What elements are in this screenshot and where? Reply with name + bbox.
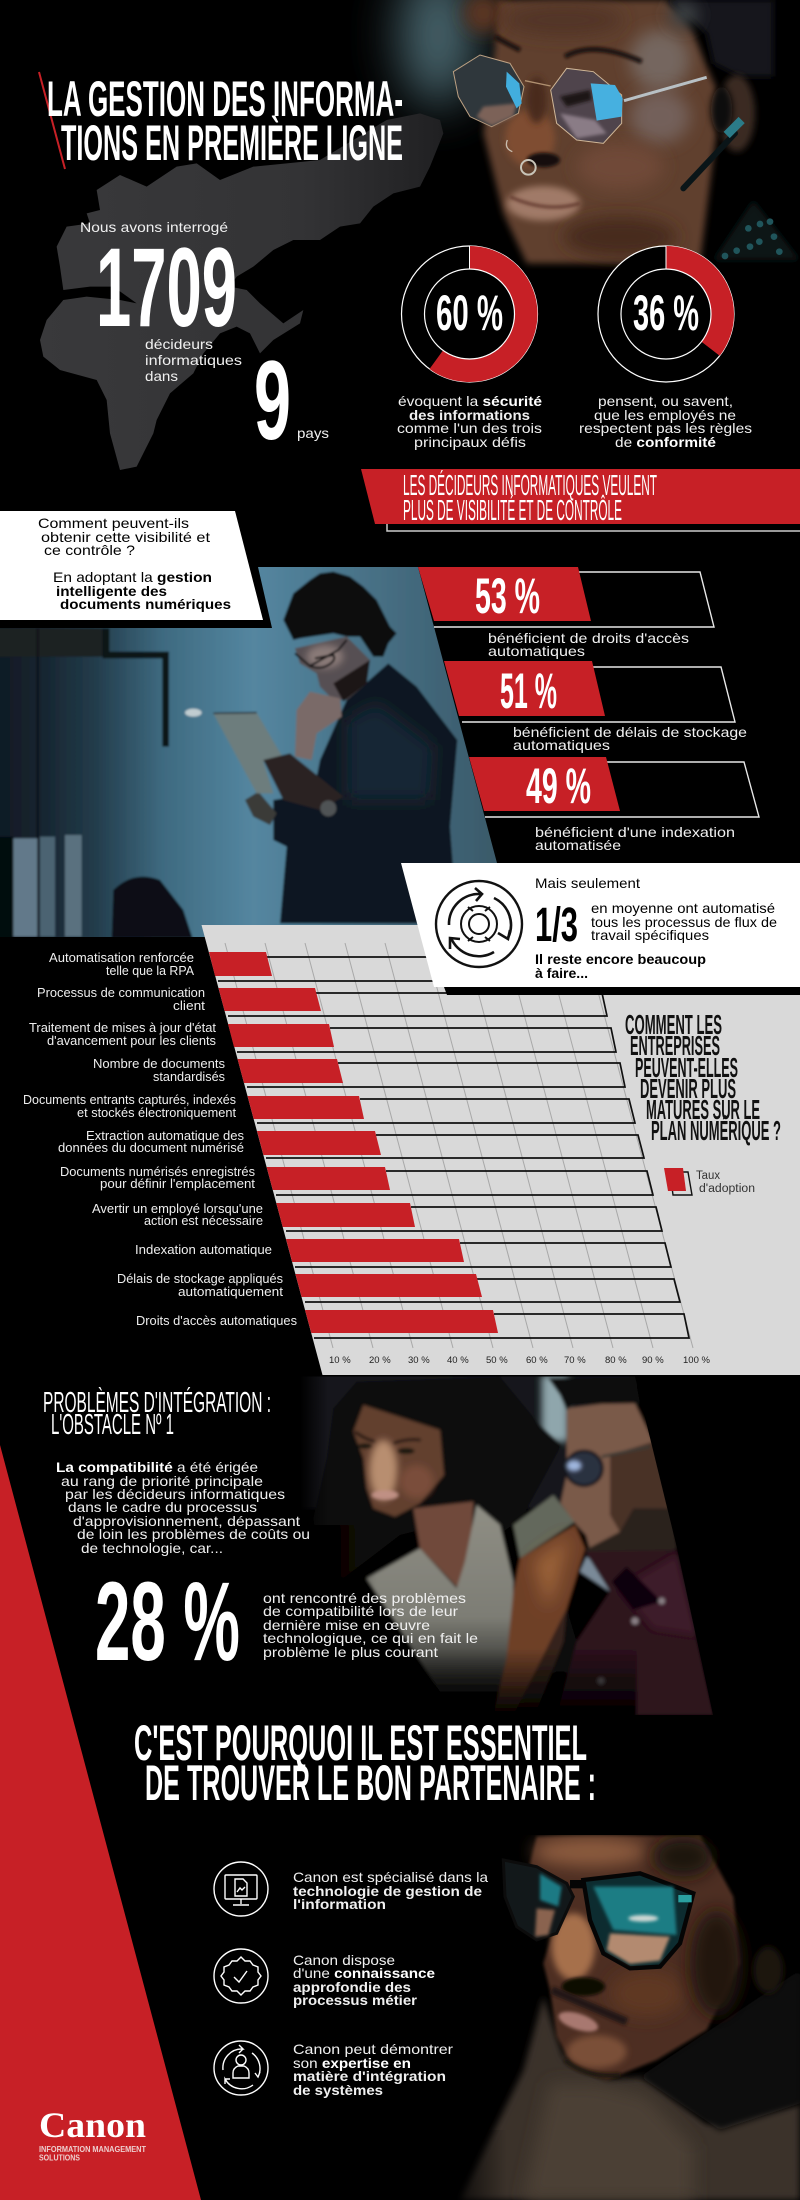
category labels: pour définir l'emplacement — [100, 1177, 256, 1191]
text: compliance caption — [579, 393, 752, 450]
category labels: Délais de stockage appliqués — [117, 1272, 283, 1286]
category labels: Indexation automatique — [135, 1243, 272, 1257]
axis labels: 100 % — [683, 1355, 710, 1366]
panel: how to get visibility: documents numériques — [60, 596, 231, 612]
text: compatibility: dans le cadre du processus — [68, 1499, 257, 1515]
text: compatibility: par les décideurs informatiques — [65, 1486, 285, 1502]
category labels: standardisés — [153, 1070, 225, 1084]
category labels: telle que la RPA — [106, 964, 195, 978]
text: compatibility: La compatibilité a été érigée — [56, 1459, 258, 1475]
panel: only one third — [401, 863, 800, 995]
stat: 53 % — [418, 567, 714, 659]
panel: only one third: à faire... — [535, 965, 588, 981]
stat: 51 % — [444, 661, 747, 753]
icon: person with cycle — [214, 2041, 268, 2095]
stat: 28 %: 28 % — [95, 1559, 240, 1684]
title: LA GESTION DES INFORMA- — [47, 71, 403, 127]
text: compliance caption: pensent, ou savent, — [598, 393, 733, 409]
text: compatibility: au rang de priorité principale — [61, 1473, 263, 1489]
list: Canon strengths: d'une connaissance — [293, 1965, 435, 1981]
list: Canon strengths: Canon est spécialisé dans la — [293, 1869, 488, 1885]
category labels: Droits d'accès automatiques — [136, 1314, 297, 1328]
panel: how to get visibility: Comment peuvent-ils — [38, 515, 189, 531]
category labels: données du document numérisé — [58, 1141, 244, 1155]
title — [39, 71, 403, 171]
stat: 1709 respondents: 1709 — [96, 225, 237, 350]
donut chart: 36 %: 36 % — [633, 285, 699, 341]
category labels — [23, 951, 297, 1328]
photo: man with glasses — [440, 1835, 800, 2200]
stat: 51 %: 51 % — [500, 663, 557, 719]
title: TIONS EN PREMIÈRE LIGNE — [61, 115, 403, 171]
axis labels: 50 % — [486, 1355, 508, 1366]
stat: 28 % — [95, 1559, 478, 1684]
logo: Canon — [39, 2105, 146, 2162]
category labels: Extraction automatique des — [86, 1129, 244, 1143]
heading: right partner — [134, 1715, 596, 1811]
category labels: automatiquement — [178, 1285, 284, 1299]
text: compliance caption: de conformité — [615, 434, 716, 450]
stat: 1709 respondents — [80, 219, 242, 384]
photo: man with tablet — [0, 567, 497, 937]
list: Canon strengths: approfondie des — [293, 1979, 411, 1995]
axis labels: 70 % — [564, 1355, 586, 1366]
category labels: Traitement de mises à jour d'état — [29, 1021, 217, 1035]
category labels: Documents numérisés enregistrés — [60, 1165, 255, 1179]
bar chart: digital maturity adoption — [0, 925, 800, 1377]
stat: 1709 respondents: Nous avons interrogé — [80, 219, 228, 235]
text: security caption: évoquent la sécurité — [398, 393, 542, 409]
panel: how to get visibility: intelligente des — [56, 583, 167, 599]
text: compatibility: de loin les problèmes de coûts ou — [77, 1526, 310, 1542]
stat: 28 %: ont rencontré des problèmes — [263, 1590, 466, 1606]
list: Canon strengths: l'information — [293, 1896, 386, 1912]
axis labels: 90 % — [642, 1355, 664, 1366]
axis labels: 10 % — [329, 1355, 351, 1366]
axis labels: 60 % — [526, 1355, 548, 1366]
world map — [40, 113, 443, 470]
icon: gear with check — [214, 1949, 268, 2003]
stat: 28 %: problème le plus courant — [263, 1644, 438, 1660]
category labels: Processus de communication — [37, 986, 205, 1000]
stat: 53 %: bénéficient de droits d'accès — [488, 630, 689, 646]
panel: only one third: en moyenne ont automatisé — [591, 900, 775, 916]
list: Canon strengths: Canon peut démontrer — [293, 2041, 453, 2057]
list: Canon strengths: processus métier — [293, 1992, 418, 2008]
stat: 1709 respondents: décideurs — [145, 336, 213, 352]
photo: two colleagues — [308, 1376, 713, 1715]
donut chart: 36 % — [598, 246, 734, 382]
axis labels: 40 % — [447, 1355, 469, 1366]
banner: visibility and control — [361, 469, 800, 531]
list: Canon strengths: son expertise en — [293, 2055, 411, 2071]
text: compliance caption: respectent pas les règles — [579, 420, 752, 436]
stat: 28 %: dernière mise en œuvre — [263, 1617, 430, 1633]
axis labels: 80 % — [605, 1355, 627, 1366]
list: Canon strengths: Canon dispose — [293, 1952, 395, 1968]
bars — [209, 952, 498, 1333]
stat: 49 %: automatisée — [535, 837, 621, 853]
category labels: Documents entrants capturés, indexés — [23, 1093, 236, 1107]
axis labels — [329, 1355, 710, 1366]
stat: 1709 respondents: informatiques — [145, 352, 242, 368]
stat: 9 countries: pays — [297, 425, 329, 441]
stat: 51 %: bénéficient de délais de stockage — [513, 724, 747, 740]
red wedge — [0, 1445, 201, 2200]
category labels: action est nécessaire — [144, 1214, 263, 1228]
text: security caption: des informations — [409, 407, 530, 423]
panel: only one third: 1/3 — [535, 899, 578, 952]
panel: only one third: tous les processus de flux de — [591, 914, 777, 930]
stat: 49 % — [469, 757, 759, 853]
category labels: d'avancement pour les clients — [47, 1034, 216, 1048]
list: Canon strengths: de systèmes — [293, 2082, 383, 2098]
heading: how can companies mature — [625, 1009, 781, 1146]
category labels: client — [173, 999, 206, 1013]
icon: document on monitor — [214, 1862, 268, 1916]
stat: 28 %: technologique, ce qui en fait le — [263, 1630, 478, 1646]
text: compatibility: d'approvisionnement, dépassant — [73, 1513, 300, 1529]
panel: how to get visibility — [0, 511, 263, 620]
logo: Canon: SOLUTIONS — [39, 2154, 81, 2162]
axis labels: 20 % — [369, 1355, 391, 1366]
text: security caption: principaux défis — [414, 434, 526, 450]
stat: 1709 respondents: dans — [145, 368, 178, 384]
list: Canon strengths: technologie de gestion de — [293, 1883, 482, 1899]
panel: how to get visibility: En adoptant la gestion — [53, 569, 212, 585]
panel: only one third: Mais seulement — [535, 875, 640, 891]
donut chart: 60 %: 60 % — [436, 285, 503, 341]
text: compatibility: de technologie, car... — [81, 1540, 223, 1556]
category labels: Avertir un employé lorsqu'une — [92, 1202, 263, 1216]
stat: 53 %: automatiques — [488, 643, 585, 659]
panel: only one third: travail spécifiques — [591, 927, 709, 943]
stat: 51 %: automatiques — [513, 737, 610, 753]
panel: how to get visibility: obtenir cette visibilité et — [41, 529, 210, 545]
panel: only one third: Il reste encore beaucoup — [535, 951, 706, 967]
category labels: Nombre de documents — [93, 1057, 225, 1071]
legend: adoption rate — [664, 1168, 755, 1195]
axis labels: 30 % — [408, 1355, 430, 1366]
logo: Canon: INFORMATION MANAGEMENT — [39, 2145, 146, 2154]
panel: how to get visibility: ce contrôle ? — [44, 542, 135, 558]
legend: adoption rate: d'adoption — [699, 1183, 755, 1195]
stat: 49 %: bénéficient d'une indexation — [535, 824, 735, 840]
heading: integration problems — [43, 1386, 271, 1441]
logo: Canon: Canon — [39, 2105, 146, 2145]
category labels: et stockés électroniquement — [77, 1106, 237, 1120]
legend: adoption rate: Taux — [696, 1170, 720, 1182]
stat: 53 %: 53 % — [475, 568, 540, 624]
stat: 49 %: 49 % — [526, 758, 591, 814]
text: security caption: comme l'un des trois — [397, 420, 542, 436]
stat: 28 %: de compatibilité lors de leur — [263, 1603, 458, 1619]
category labels: Automatisation renforcée — [49, 951, 194, 965]
photo: woman with glasses — [400, 0, 800, 263]
donut chart: 60 % — [402, 246, 538, 382]
text: compliance caption: que les employés ne — [594, 407, 736, 423]
list: Canon strengths: matière d'intégration — [293, 2068, 446, 2084]
text: security caption — [397, 393, 542, 450]
heading: integration problems: PROBLÈMES D'INTÉGRATION : — [43, 1386, 271, 1419]
icon: cycle — [436, 881, 522, 967]
text: compatibility — [56, 1459, 310, 1556]
heading: integration problems: L'OBSTACLE Nº 1 — [51, 1409, 174, 1441]
stat: 9 countries: 9 — [254, 338, 291, 463]
list: Canon strengths — [214, 1862, 488, 2098]
